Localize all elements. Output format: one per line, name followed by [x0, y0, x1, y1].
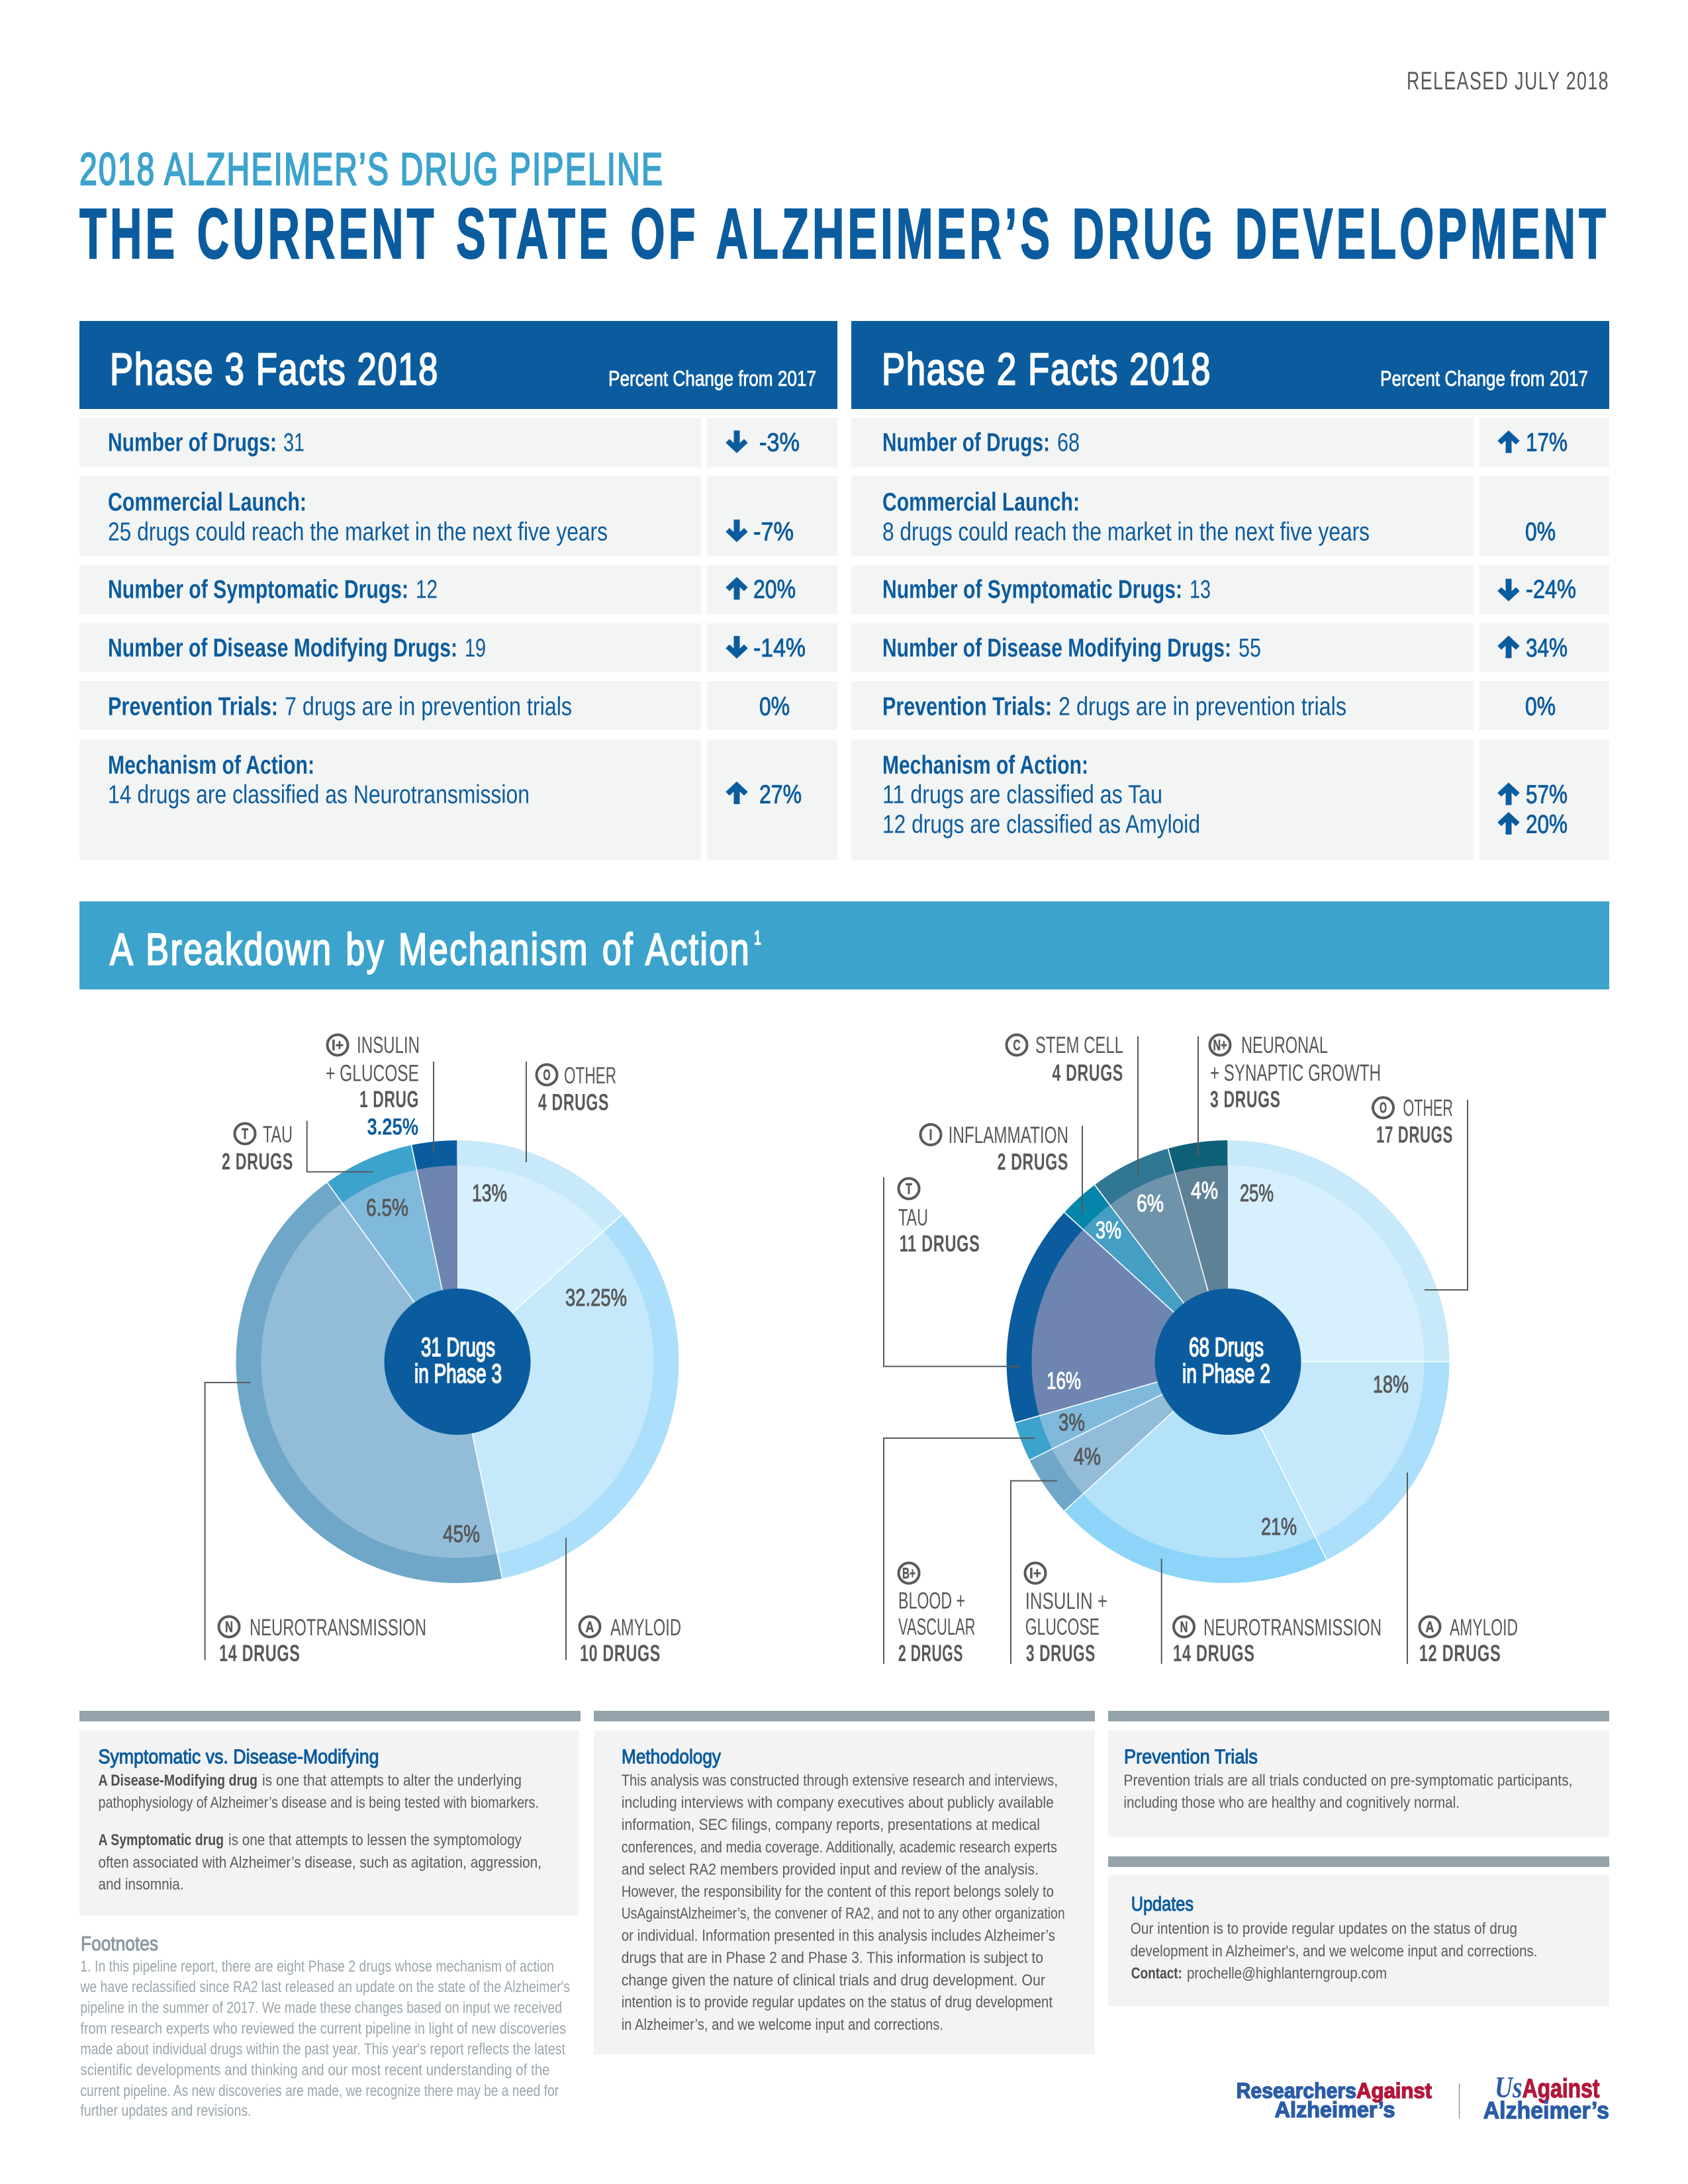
panel: Phase 2 facts: [851, 321, 1609, 860]
callout: neurotransmission (Phase 3): NEUROTRANSMISSION: [250, 1615, 426, 1641]
center: 68 drugs in Phase 2: 68 Drugs: [1189, 1333, 1264, 1362]
panel: symptomatic vs disease-modifying: [79, 1711, 581, 1915]
chart: Phase 2 donut: [1015, 1149, 1450, 1570]
panel: prevention trials: Prevention trials are all trials conducted on pre-symptomatic participants,: [1123, 1772, 1573, 1790]
logo: Researchers Against Alzheimer's: Alzheimer’s: [1275, 2097, 1395, 2122]
callout: other (Phase 2): OTHER: [1403, 1095, 1453, 1121]
callout: tau (Phase 2): [884, 1177, 1020, 1367]
row: disease modifying drugs: 19: [465, 634, 486, 662]
wedges: Phase 3: [249, 1153, 666, 1570]
panel: updates: [1108, 1856, 1609, 2007]
panel: methodology: intention is to provide regular updates on the status of drug development: [622, 1993, 1053, 2011]
row: disease modifying drugs: Number of Disease Modifying Drugs:: [108, 634, 457, 662]
footnotes: [80, 1932, 570, 2120]
row: number of drugs: 68: [1057, 429, 1080, 457]
callout: tau (Phase 3): [222, 1121, 373, 1175]
callout: other (Phase 3): 4 DRUGS: [538, 1089, 609, 1116]
center: 31 drugs in Phase 3: [384, 1289, 531, 1435]
row: symptomatic drugs: [851, 565, 1609, 615]
row: number of drugs: 17%: [1526, 429, 1568, 457]
callout: inflammation (Phase 2): 2 DRUGS: [998, 1149, 1068, 1175]
percent labels: Phase 2: 4%: [1191, 1177, 1218, 1204]
row: number of drugs: [851, 418, 1609, 467]
row: mechanism of action: 27%: [759, 781, 802, 809]
callout: neuronal + synaptic growth (Phase 2): [1198, 1032, 1381, 1156]
row: prevention trials: 0%: [759, 693, 790, 721]
callout: blood + vascular (Phase 2): BLOOD +: [898, 1588, 965, 1614]
callout: neuronal + synaptic growth (Phase 2): + SYNAPTIC GROWTH: [1210, 1060, 1381, 1086]
panel: Phase 3 facts: [79, 321, 837, 860]
Phase 3 header: Percent Change from 2017: [608, 367, 816, 390]
center: 68 drugs in Phase 2: [1154, 1289, 1301, 1435]
percent labels: Phase 2: 3%: [1058, 1409, 1085, 1436]
row: commercial launch: 25 drugs could reach the market in the next five years: [108, 518, 608, 546]
row: mechanism of action: Mechanism of Action:: [882, 751, 1088, 780]
panel: prevention trials: [1108, 1711, 1609, 1837]
footnotes: Footnotes: [81, 1932, 158, 1955]
panel: symptomatic vs disease-modifying: Symptomatic vs. Disease-Modifying: [98, 1745, 379, 1768]
row: prevention trials: 0%: [1525, 693, 1556, 721]
callout: amyloid (Phase 3): A: [585, 1618, 594, 1635]
row: number of drugs: Number of Drugs:: [882, 429, 1050, 457]
callout: other (Phase 2): [1373, 1095, 1468, 1290]
percent labels: Phase 2: 3%: [1096, 1216, 1121, 1244]
Phase 2 header: Percent Change from 2017: [1380, 367, 1588, 390]
footnotes: made about individual drugs within the past year. This year's report reflects the latest: [80, 2040, 565, 2058]
row: disease modifying drugs: 34%: [1526, 634, 1568, 662]
percent labels: Phase 3: 6.5%: [366, 1194, 408, 1221]
Phase 2 header: [851, 321, 1609, 409]
row: disease modifying drugs: 55: [1239, 634, 1261, 662]
row: symptomatic drugs: Number of Symptomatic Drugs:: [108, 575, 408, 604]
callout: insulin + glucose (Phase 3): I+: [332, 1036, 344, 1054]
row: prevention trials: 2 drugs are in prevention trials: [1058, 693, 1346, 721]
callout: insulin + glucose (Phase 2): INSULIN +: [1025, 1588, 1107, 1614]
subtitle: 2018 ALZHEIMER’S DRUG PIPELINE: [79, 144, 664, 195]
callout: other (Phase 3): OTHER: [564, 1063, 616, 1089]
row: mechanism of action: [79, 739, 837, 860]
callout: blood + vascular (Phase 2): VASCULAR: [898, 1614, 976, 1640]
row: number of drugs: -3%: [759, 429, 800, 457]
logo: UsAgainst Alzheimer's: Against: [1523, 2074, 1599, 2103]
wedges: Phase 2: [1019, 1153, 1436, 1570]
callout: blood + vascular (Phase 2): B+: [902, 1565, 915, 1582]
callout: neuronal + synaptic growth (Phase 2): N+: [1213, 1036, 1227, 1054]
row: disease modifying drugs: Number of Disease Modifying Drugs:: [882, 634, 1231, 662]
callout: amyloid (Phase 3): AMYLOID: [610, 1615, 681, 1641]
callout: other (Phase 3): O: [543, 1066, 551, 1083]
section band: breakdown by mechanism of action: A Breakdown by Mechanism of Action: [110, 924, 751, 974]
callout: inflammation (Phase 2): INFLAMMATION: [949, 1122, 1068, 1148]
percent labels: Phase 2: 16%: [1047, 1367, 1081, 1394]
callout: neurotransmission (Phase 2): [1162, 1559, 1382, 1666]
percent labels: Phase 2: [1047, 1177, 1409, 1540]
callout: amyloid (Phase 2): AMYLOID: [1450, 1615, 1518, 1641]
section band: breakdown by mechanism of action: 1: [754, 927, 761, 949]
callout: stem cell (Phase 2): C: [1013, 1036, 1021, 1054]
row: mechanism of action: [851, 739, 1609, 860]
footnotes: current pipeline. As new discoveries are made, we recognize there may be a need for: [80, 2082, 559, 2100]
panel: prevention trials: including those who are healthy and cognitively normal.: [1123, 1794, 1460, 1812]
callout: amyloid (Phase 3): [566, 1538, 681, 1666]
footnotes: pipeline in the summer of 2017. We made these changes based on input we received: [80, 1999, 562, 2017]
logo: Researchers Against Alzheimer's: Against: [1356, 2079, 1432, 2103]
panel: updates: development in Alzheimer's, and we welcome input and corrections.: [1131, 1942, 1537, 1960]
row: mechanism of action: 12 drugs are classified as Amyloid: [882, 811, 1200, 839]
row: commercial launch: [851, 476, 1609, 556]
row: mechanism of action: 14 drugs are classified as Neurotransmission: [108, 781, 530, 809]
release date: RELEASED JULY 2018: [1407, 68, 1609, 95]
panel: methodology: However, the responsibility for the content of this report belongs solely to: [622, 1883, 1054, 1901]
callout: other (Phase 3): [526, 1062, 616, 1162]
panel: methodology: conferences, and media coverage. Additionally, academic research experts: [622, 1839, 1057, 1856]
panel: symptomatic vs disease-modifying: and insomnia.: [98, 1876, 184, 1893]
panel: symptomatic vs disease-modifying: is one that attempts to lessen the symptomology: [228, 1831, 522, 1849]
callout: tau (Phase 2): TAU: [898, 1205, 928, 1231]
section band: breakdown by mechanism of action: [79, 901, 1609, 989]
row: symptomatic drugs: [79, 565, 837, 615]
callout: insulin + glucose (Phase 3): [326, 1032, 434, 1154]
row: prevention trials: Prevention Trials:: [108, 693, 278, 721]
logo: UsAgainst Alzheimer's: Us: [1495, 2070, 1523, 2104]
callout: insulin + glucose (Phase 2): I+: [1029, 1565, 1041, 1582]
row: mechanism of action: Mechanism of Action:: [108, 751, 314, 780]
callout: amyloid (Phase 3): 10 DRUGS: [580, 1641, 661, 1666]
callout: tau (Phase 3): T: [242, 1125, 248, 1142]
row: mechanism of action: 11 drugs are classified as Tau: [882, 781, 1162, 809]
panel: updates: Updates: [1131, 1892, 1194, 1915]
panel: methodology: including interviews with company executives about publicly available: [622, 1794, 1054, 1812]
row: prevention trials: [79, 681, 837, 730]
title block: [79, 144, 1609, 273]
panel: updates: prochelle@highlanterngroup.com: [1187, 1964, 1387, 1983]
callout: other (Phase 2): 17 DRUGS: [1376, 1122, 1453, 1148]
row: mechanism of action: 20%: [1526, 811, 1568, 839]
row: prevention trials: [851, 681, 1609, 730]
row: mechanism of action: 57%: [1526, 781, 1568, 809]
panel: methodology: or individual. Information presented in this analysis includes Alzheimer’s: [622, 1927, 1055, 1945]
row: commercial launch: 0%: [1525, 518, 1556, 546]
logo: Researchers Against Alzheimer's: Researchers: [1237, 2079, 1356, 2103]
callout: tau (Phase 3): TAU: [263, 1122, 293, 1148]
callout: blood + vascular (Phase 2): [884, 1438, 1035, 1666]
row: disease modifying drugs: -14%: [753, 634, 806, 662]
callout: amyloid (Phase 2): [1407, 1473, 1518, 1666]
callout: stem cell (Phase 2): [1006, 1032, 1138, 1175]
callout: neurotransmission (Phase 2): N: [1180, 1618, 1188, 1635]
percent labels: Phase 2: 4%: [1074, 1443, 1101, 1470]
logo: UsAgainst Alzheimer's: Alzheimer’s: [1483, 2097, 1609, 2124]
callout: neurotransmission (Phase 3): [205, 1383, 426, 1666]
row: symptomatic drugs: 12: [416, 575, 438, 604]
row: number of drugs: Number of Drugs:: [108, 429, 277, 457]
panel: prevention trials: Prevention Trials: [1124, 1745, 1258, 1768]
callout: amyloid (Phase 2): 12 DRUGS: [1419, 1641, 1501, 1666]
callout: tau (Phase 2): 11 DRUGS: [900, 1231, 980, 1257]
row: number of drugs: [79, 418, 837, 467]
row: symptomatic drugs: 20%: [753, 575, 796, 604]
callout: insulin + glucose (Phase 2): [1011, 1481, 1107, 1666]
callout: insulin + glucose (Phase 3): 3.25%: [367, 1115, 418, 1140]
Phase 3 header: Phase 3 Facts 2018: [110, 344, 439, 394]
percent labels: Phase 3: 13%: [472, 1179, 507, 1206]
row: symptomatic drugs: Number of Symptomatic Drugs:: [882, 575, 1182, 604]
panel: methodology: Methodology: [622, 1745, 721, 1768]
panel: methodology: UsAgainstAlzheimer’s, the convener of RA2, and not to any other organization: [622, 1905, 1065, 1923]
panel: symptomatic vs disease-modifying: is one that attempts to alter the underlying: [262, 1772, 522, 1790]
panel: symptomatic vs disease-modifying: A Disease-Modifying drug: [98, 1772, 258, 1790]
callout: neuronal + synaptic growth (Phase 2): NEURONAL: [1241, 1032, 1328, 1058]
row: commercial launch: Commercial Launch:: [108, 488, 306, 516]
callout: neurotransmission (Phase 2): NEUROTRANSMISSION: [1203, 1615, 1382, 1641]
Phase 2 header: Phase 2 Facts 2018: [882, 344, 1211, 394]
row: symptomatic drugs: 13: [1190, 575, 1211, 604]
panel: updates: Contact:: [1131, 1964, 1182, 1983]
callout: neuronal + synaptic growth (Phase 2): 3 DRUGS: [1210, 1087, 1281, 1113]
callout: inflammation (Phase 2): [920, 1122, 1082, 1212]
footnotes: from research experts who reviewed the current pipeline in light of new discoveries: [80, 2020, 566, 2038]
panel: symptomatic vs disease-modifying: A Symptomatic drug: [98, 1831, 224, 1849]
percent labels: Phase 2: 18%: [1373, 1371, 1409, 1398]
panel: symptomatic vs disease-modifying: pathophysiology of Alzheimer’s disease and is being tested with biomarkers.: [98, 1794, 539, 1812]
callout: insulin + glucose (Phase 2): GLUCOSE: [1025, 1614, 1100, 1640]
panel: methodology: in Alzheimer’s, and we welcome input and corrections.: [622, 2016, 943, 2034]
callout: inflammation (Phase 2): I: [929, 1126, 932, 1144]
chart: Phase 3 donut: [249, 1145, 666, 1578]
callout: blood + vascular (Phase 2): 2 DRUGS: [898, 1641, 963, 1666]
center: 68 drugs in Phase 2: in Phase 2: [1182, 1359, 1270, 1388]
row: disease modifying drugs: [851, 623, 1609, 672]
callout: neurotransmission (Phase 2): 14 DRUGS: [1173, 1641, 1255, 1666]
panel: methodology: information, SEC filings, company reports, presentations at medical: [622, 1816, 1040, 1834]
callout: stem cell (Phase 2): 4 DRUGS: [1053, 1060, 1123, 1086]
row: symptomatic drugs: -24%: [1526, 575, 1576, 604]
Phase 3 header: [79, 321, 837, 409]
panel: methodology: [594, 1711, 1095, 2054]
footnotes: further updates and revisions.: [80, 2102, 252, 2120]
percent labels: Phase 2: 21%: [1261, 1513, 1297, 1540]
row: prevention trials: 7 drugs are in prevention trials: [285, 693, 572, 721]
percent labels: Phase 2: 6%: [1137, 1190, 1164, 1217]
center: 31 drugs in Phase 3: 31 Drugs: [421, 1333, 495, 1362]
callout: insulin + glucose (Phase 2): 3 DRUGS: [1026, 1641, 1096, 1666]
footnotes: we have reclassified since RA2 last released an update on the state of the Alzheimer's: [80, 1978, 570, 1996]
percent labels: Phase 3: [366, 1179, 627, 1547]
center: 31 drugs in Phase 3: in Phase 3: [414, 1359, 502, 1388]
callout: stem cell (Phase 2): STEM CELL: [1035, 1032, 1123, 1058]
row: prevention trials: Prevention Trials:: [882, 693, 1052, 721]
percent labels: Phase 3: 45%: [443, 1520, 480, 1547]
callout: tau (Phase 2): T: [906, 1180, 912, 1197]
panel: methodology: change given the nature of clinical trials and drug development. Our: [622, 1972, 1045, 1989]
callout: other (Phase 2): O: [1380, 1099, 1387, 1116]
panel: methodology: This analysis was constructed through extensive research and interviews,: [622, 1772, 1058, 1790]
panel: methodology: and select RA2 members provided input and review of the analysis.: [622, 1861, 1039, 1878]
row: commercial launch: [79, 476, 837, 556]
callout: neurotransmission (Phase 3): 14 DRUGS: [219, 1641, 301, 1666]
row: commercial launch: 8 drugs could reach the market in the next five years: [882, 518, 1370, 546]
percent labels: Phase 3: 32.25%: [565, 1284, 627, 1311]
percent labels: Phase 2: 25%: [1240, 1179, 1274, 1206]
callout: amyloid (Phase 2): A: [1426, 1618, 1434, 1635]
panel: methodology: drugs that are in Phase 2 and Phase 3. This information is subject to: [622, 1949, 1043, 1967]
panel: updates: Our intention is to provide regular updates on the status of drug: [1131, 1920, 1517, 1938]
row: disease modifying drugs: [79, 623, 837, 672]
logo: UsAgainst Alzheimer's: [1483, 2070, 1609, 2124]
logo: Researchers Against Alzheimer's: [1237, 2079, 1432, 2122]
panel: symptomatic vs disease-modifying: often associated with Alzheimer’s disease, such as agitation, aggression,: [98, 1854, 541, 1872]
footnotes: 1. In this pipeline report, there are eight Phase 2 drugs whose mechanism of action: [80, 1958, 554, 1976]
callout: insulin + glucose (Phase 3): INSULIN: [357, 1032, 420, 1058]
row: commercial launch: -7%: [753, 518, 794, 546]
row: number of drugs: 31: [283, 429, 305, 457]
callout: insulin + glucose (Phase 3): + GLUCOSE: [326, 1060, 419, 1087]
row: commercial launch: Commercial Launch:: [882, 488, 1080, 516]
callout: tau (Phase 3): 2 DRUGS: [222, 1149, 293, 1175]
callout: neurotransmission (Phase 3): N: [225, 1618, 233, 1635]
footnotes: scientific developments and thinking and our most recent understanding of the: [80, 2061, 550, 2079]
callout: insulin + glucose (Phase 3): 1 DRUG: [359, 1087, 419, 1113]
